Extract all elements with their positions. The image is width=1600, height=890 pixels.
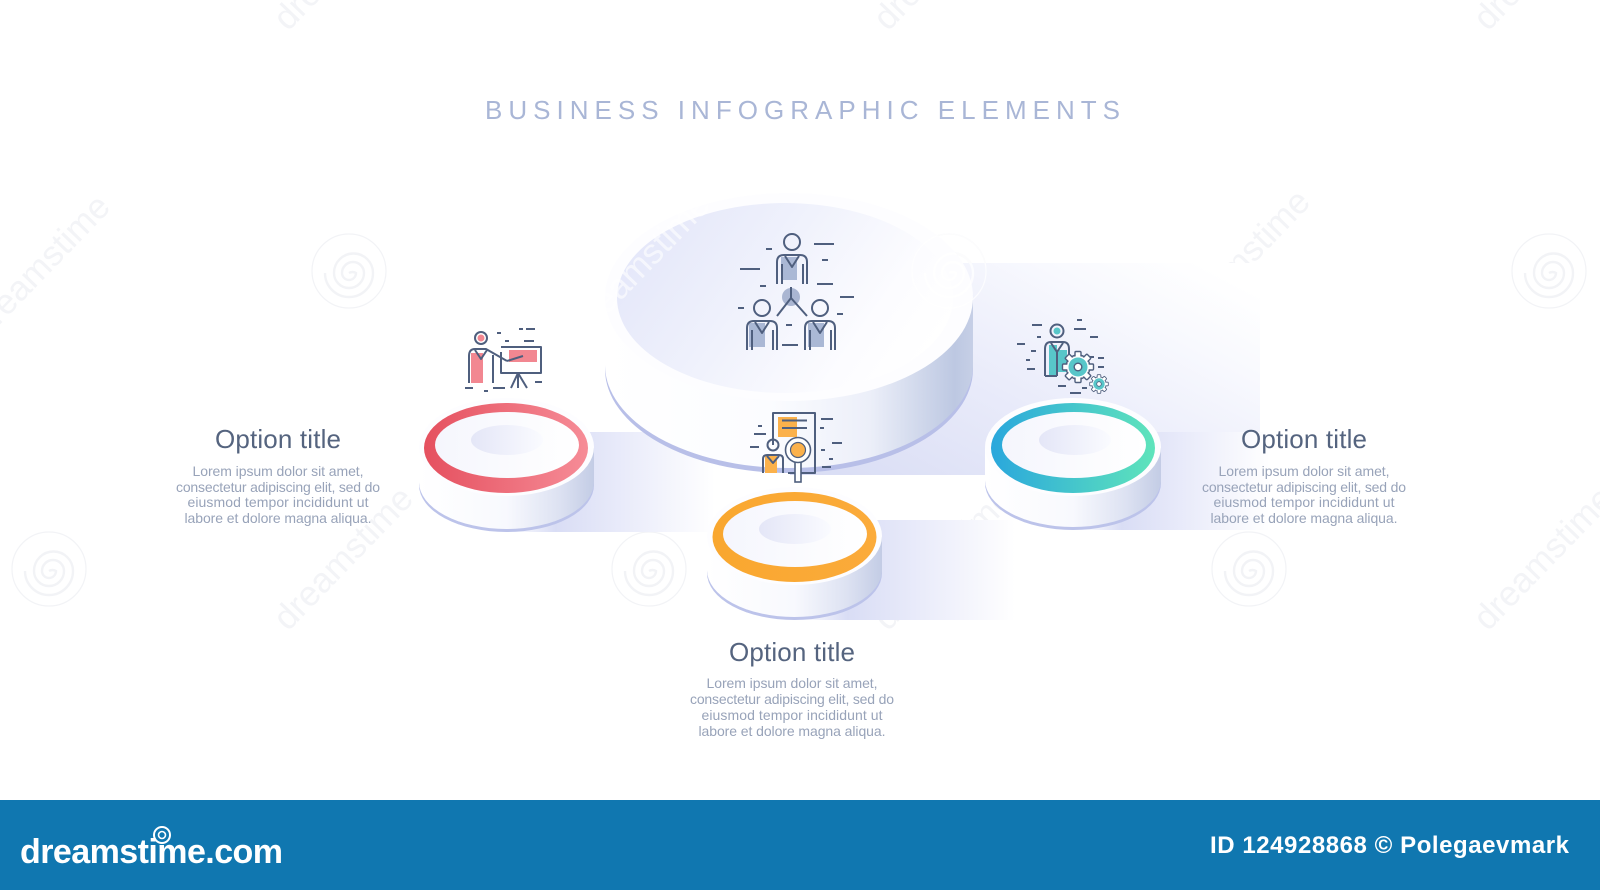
text block: right option: eiusmod tempor incididunt ut <box>1214 494 1395 510</box>
text block: centre option: labore et dolore magna aliqua. <box>698 723 886 739</box>
text block: left option: Lorem ipsum dolor sit amet, <box>192 463 364 479</box>
text block: right option <box>1202 424 1406 526</box>
text block: left option: consectetur adipiscing elit, sed do <box>176 479 380 495</box>
icon: team hierarchy <box>738 234 854 350</box>
text block: right option: Option title <box>1241 424 1367 454</box>
central cylinder <box>605 193 973 473</box>
white watermark overlay on the shapes: dreamstime <box>563 185 718 344</box>
shadow: red disk <box>510 432 715 532</box>
shadow: orange disk <box>800 520 1015 620</box>
text block: left option: Option title <box>215 424 341 454</box>
text block: centre option: Option title <box>729 637 855 667</box>
text block: centre option: eiusmod tempor incididunt ut <box>702 707 883 723</box>
text block: centre option: Lorem ipsum dolor sit amet, <box>706 675 878 691</box>
icon: presenter at board <box>465 329 542 391</box>
watermark pattern: dreamstime <box>1163 182 1318 341</box>
text block: left option: labore et dolore magna aliqua. <box>184 510 372 526</box>
text block: centre option: consectetur adipiscing elit, sed do <box>690 691 894 707</box>
text block: right option: consectetur adipiscing elit, sed do <box>1202 479 1406 495</box>
text block: centre option <box>690 637 894 739</box>
disk: red <box>419 398 594 532</box>
brand logo: dreamstime.com <box>20 833 283 871</box>
icon: document and magnifier <box>750 413 842 482</box>
icon: worker with gears <box>1017 320 1108 393</box>
text block: right option: Lorem ipsum dolor sit amet, <box>1218 463 1390 479</box>
text block: left option: eiusmod tempor incididunt ut <box>188 494 369 510</box>
disk: orange <box>707 487 882 620</box>
image id and credit: ID 124928868 © Polegaevmark <box>1210 832 1570 859</box>
white watermark overlay on the shapes <box>563 185 986 344</box>
watermark pattern: dreamstime <box>266 479 421 638</box>
shadow: teal disk <box>1080 432 1270 530</box>
footer bar <box>0 800 1600 890</box>
watermark pattern <box>0 0 1600 638</box>
watermark pattern: dreamstime <box>866 479 1021 638</box>
text block: left option <box>176 424 380 526</box>
title: BUSINESS INFOGRAPHIC ELEMENTS <box>485 95 1120 125</box>
text block: right option: labore et dolore magna aliqua. <box>1210 510 1398 526</box>
shadow: central cylinder <box>790 263 1260 475</box>
disk: teal <box>985 398 1161 530</box>
